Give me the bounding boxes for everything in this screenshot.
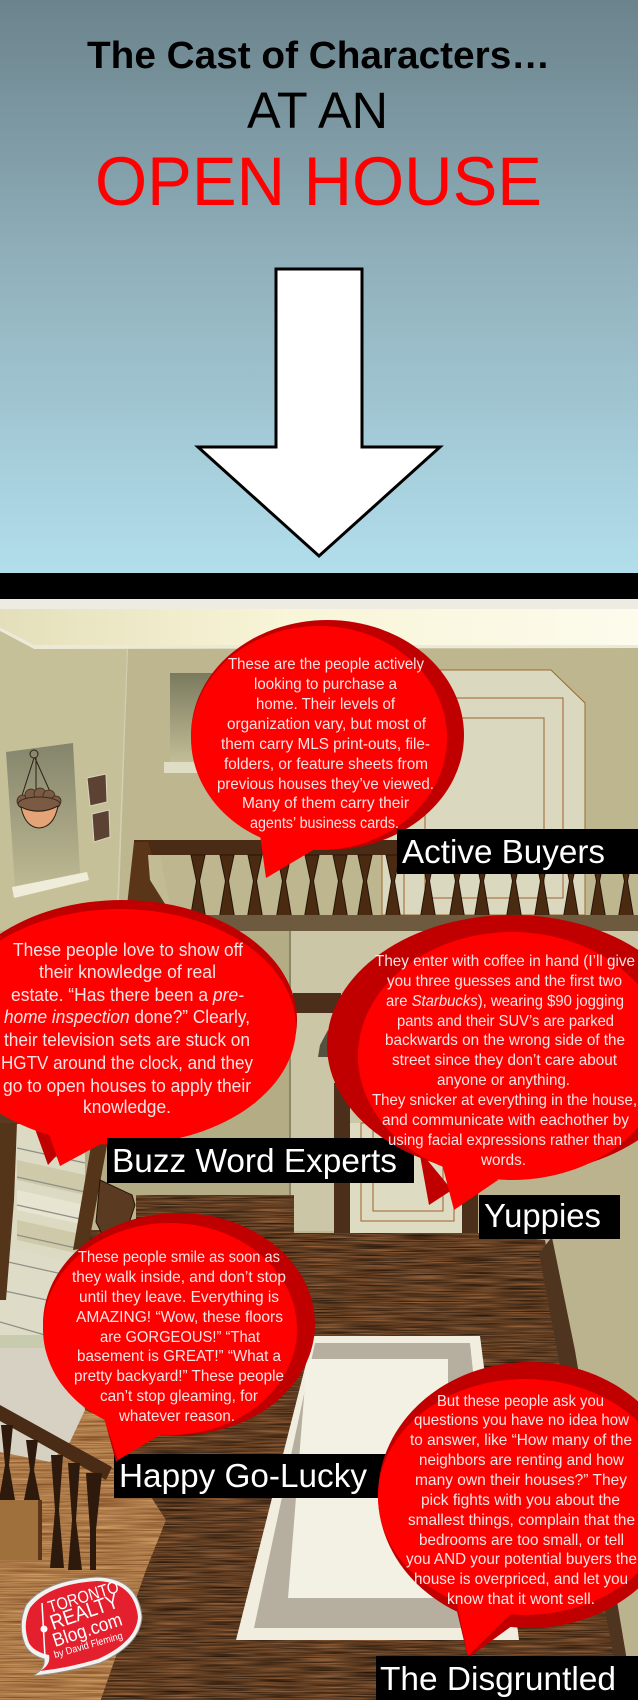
pale strip [0, 599, 638, 609]
bubble text: pants and their SUV’s are parked [397, 1013, 614, 1030]
ceiling [0, 609, 638, 645]
logo: Toronto Realty Blog: REALTY [47, 1590, 122, 1635]
bubble text: looking to purchase a [254, 676, 397, 693]
bubble text: their television sets are stuck on [4, 1030, 250, 1050]
bubble text: But these people ask you [437, 1393, 604, 1410]
bubble text: know that it wont sell. [447, 1591, 595, 1608]
panel: title area sky gradient [0, 0, 638, 573]
logo: Toronto Realty Blog: Blog.com [50, 1610, 125, 1652]
bubble text: anyone or anything. [437, 1072, 570, 1089]
small frames [87, 774, 110, 842]
left wall [0, 631, 128, 930]
speech bubble: yuppies [327, 915, 638, 1210]
bubble text: until they leave. Everything is [79, 1289, 279, 1306]
logo: Toronto Realty Blog [21, 1577, 142, 1676]
lower staircase wood [0, 1405, 166, 1702]
lower walls [0, 931, 638, 1240]
bubble text: previous houses they’ve viewed. [217, 776, 434, 793]
bubble text: house is overpriced, and let you [414, 1571, 628, 1588]
bubble text: you three guesses and the first two [387, 973, 622, 990]
bubble text: their knowledge of real [39, 962, 216, 982]
bubble text [217, 656, 434, 832]
title: The Cast of Characters: The Cast of Characters… [87, 35, 550, 77]
upper door [382, 670, 585, 918]
left staircase upper [0, 1113, 135, 1350]
bubble text: and communicate with eachother by [382, 1112, 629, 1129]
bubble text: bedrooms are too small, or tell [419, 1532, 624, 1549]
logo: Toronto Realty Blog: TORONTO [46, 1577, 121, 1617]
bubble text [72, 1249, 286, 1425]
bubble text: to answer, like “How many of the [410, 1432, 632, 1449]
bubble text [406, 1393, 637, 1608]
subtitle: AT AN: AT AN [247, 82, 388, 139]
railing [120, 840, 638, 931]
bubble text: smallest things, complain that the [408, 1512, 635, 1529]
bubble text: HGTV around the clock, and they [1, 1053, 253, 1073]
bubble text [1, 940, 253, 1117]
bubble text: These are the people actively [228, 656, 424, 673]
bubble text [372, 953, 637, 1169]
bubble text: words. [480, 1152, 526, 1169]
bubble text: go to open houses to apply their [3, 1076, 251, 1096]
bubble text: knowledge. [83, 1097, 171, 1117]
bubble text: These people smile as soon as [78, 1249, 280, 1266]
back wall [0, 609, 638, 1702]
black divider band [0, 573, 638, 599]
label: The Disgruntled: The Disgruntled [380, 1660, 616, 1697]
bubble text: home inspection done?” Clearly, [4, 1007, 250, 1027]
carpet [0, 1348, 85, 1462]
bubble text: street since they don’t care about [392, 1052, 618, 1069]
bubble text: many own their houses?” They [415, 1472, 627, 1489]
bubble text: whatever reason. [118, 1408, 235, 1425]
bubble text: them carry MLS print-outs, file- [221, 736, 430, 753]
bubble text: are GORGEOUS!” “That [100, 1329, 261, 1346]
label: Buzz Word Experts: Buzz Word Experts [112, 1142, 397, 1179]
label: Active Buyers [397, 829, 638, 874]
label: Happy Go-Lucky: Happy Go-Lucky [119, 1457, 367, 1494]
bubble text: neighbors are renting and how [419, 1452, 624, 1469]
speech bubble: active buyers [191, 620, 464, 878]
speech bubble: the disgruntled [378, 1362, 638, 1658]
bubble text: home. Their levels of [256, 696, 396, 713]
rug [236, 1336, 519, 1640]
bubble text: agents’ business cards. [250, 815, 399, 832]
label: Active Buyers: Active Buyers [402, 833, 605, 870]
bubble text: estate. “Has there been a pre- [11, 985, 244, 1005]
bubble text: questions you have no idea how [414, 1412, 629, 1429]
panel: open house room illustration [0, 609, 638, 1702]
icon: CN tower [40, 1603, 48, 1657]
bubble text: organization vary, but most of [227, 716, 427, 733]
logo: Toronto Realty Blog: by David Fleming [53, 1631, 124, 1661]
bubble text: folders, or feature sheets from [224, 756, 428, 773]
window [164, 673, 226, 773]
label: Yuppies: Yuppies [484, 1197, 601, 1234]
speech bubble: happy go-lucky [43, 1213, 315, 1462]
bubble text: are Starbucks), wearing $90 jogging [386, 993, 624, 1010]
floor baseboard [539, 1237, 634, 1702]
speech bubble: buzz word experts [0, 900, 297, 1166]
bubble text: pretty backyard!” These people [74, 1368, 284, 1385]
bubble text: using facial expressions rather than [388, 1132, 622, 1149]
bottom edge [0, 1700, 638, 1702]
bubble text: can’t stop gleaming, for [100, 1388, 259, 1405]
bubble text: basement is GREAT!” “What a [77, 1348, 281, 1365]
bubble text: AMAZING! “Wow, these floors [76, 1309, 283, 1326]
bubble text: they walk inside, and don’t stop [72, 1269, 286, 1286]
headline: OPEN HOUSE: OPEN HOUSE [95, 143, 542, 220]
arrow: down [198, 269, 440, 556]
wood floor [85, 1230, 631, 1702]
bubble text: Many of them carry their [242, 795, 410, 812]
bubble text: backwards on the wrong side of the [385, 1032, 625, 1049]
wall picture with hanging plant [6, 743, 89, 898]
bubble text: pick fights with you about the [421, 1492, 620, 1509]
lower door [136, 1083, 478, 1235]
bubble text: These people love to show off [13, 940, 244, 960]
